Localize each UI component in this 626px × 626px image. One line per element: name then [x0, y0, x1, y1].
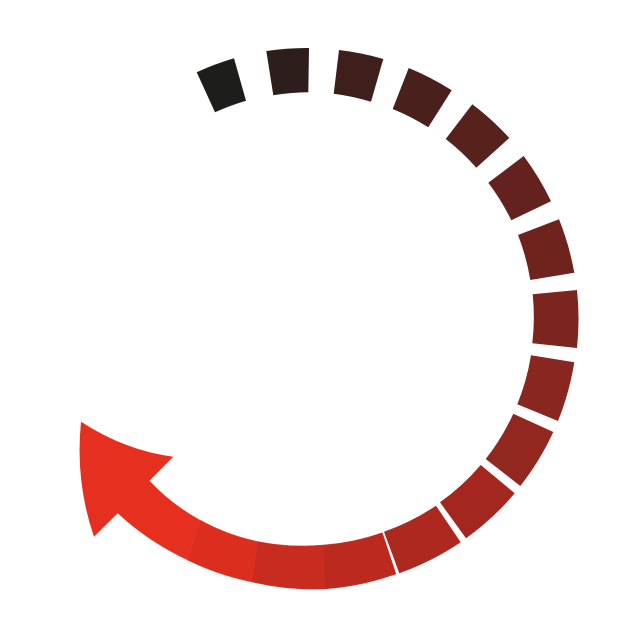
segment 5 — [446, 104, 509, 168]
segment 2 — [266, 48, 309, 95]
segment 4 — [393, 68, 452, 127]
segment 11 — [440, 465, 515, 538]
arrow head — [80, 422, 200, 560]
segment 1: darkest block — [197, 58, 246, 112]
segment 6 — [488, 156, 551, 220]
segment 9 — [517, 355, 574, 421]
segment 3 — [334, 50, 383, 102]
arrow tail band: mid — [252, 542, 324, 589]
segment 10 — [486, 414, 553, 486]
segment 12 — [384, 506, 461, 573]
segment 7 — [518, 219, 574, 280]
arrow tail band: light — [187, 520, 258, 582]
segment 8 — [532, 290, 579, 348]
arrow tail band: darkest — [323, 533, 396, 589]
red arrow with shaded tail bands — [80, 422, 396, 589]
